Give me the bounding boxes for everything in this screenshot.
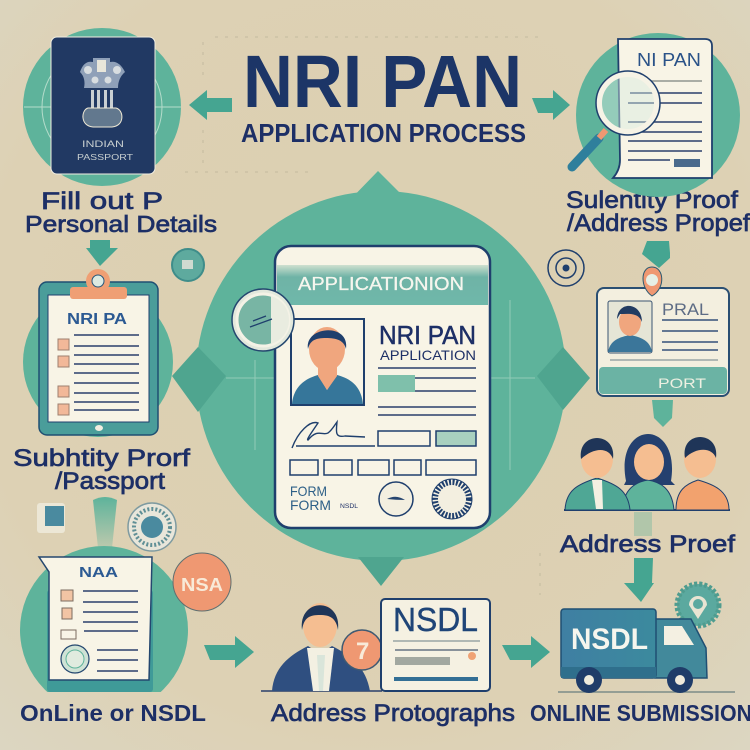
label: identity and address proof [566, 187, 750, 237]
cab [655, 619, 707, 678]
teal circle [576, 33, 740, 197]
window [664, 626, 694, 645]
wheels [576, 667, 693, 693]
chassis [561, 667, 656, 678]
label: online or NSDL: OnLine or NSDL [20, 700, 206, 726]
stamp [432, 479, 472, 519]
label: identity proof passport [13, 445, 190, 495]
step: ID card [597, 288, 729, 396]
step: passport [23, 28, 181, 186]
card lines [610, 320, 718, 360]
title: NRI PAN: NRI PAN [243, 40, 522, 123]
subtitle: APPLICATION PROCESS [241, 118, 526, 148]
signature [292, 422, 375, 448]
document lines [628, 81, 702, 160]
label: identity and address proof: /Address Propef [567, 210, 750, 237]
applicant photo [291, 319, 364, 405]
icon: small coin [172, 249, 204, 281]
arrow: to document [532, 90, 570, 120]
form title [379, 320, 476, 363]
passport text: INDIAN [82, 139, 124, 149]
form card [275, 246, 490, 528]
passport text [77, 139, 133, 162]
card heading: PRAL [662, 300, 709, 319]
teal circle [23, 287, 173, 437]
suit body [272, 646, 370, 691]
step: people group [564, 434, 730, 510]
orange badge: 7 [356, 638, 369, 665]
form labels: FORM [290, 483, 327, 499]
document heading: NAA [79, 564, 118, 581]
arrow: faded connector [634, 512, 652, 536]
form title: APPLICATION [380, 347, 476, 363]
document tab [674, 159, 700, 167]
teal circle [20, 546, 188, 692]
form boxes row two [290, 460, 476, 475]
form labels: NSDL [340, 504, 359, 510]
label: fill out personal details: Fill out P [41, 188, 163, 215]
label: identity proof passport: /Passport [55, 468, 165, 495]
form labels: FORM [290, 497, 331, 513]
label: address photographs: Address Protographs [271, 700, 515, 727]
paper heading: NRI PA [67, 311, 127, 328]
magnifier [572, 71, 660, 167]
national emblem [80, 58, 125, 127]
arrow: to id card [642, 241, 670, 268]
passport cover [51, 37, 155, 174]
arrow: id card to people [652, 400, 673, 427]
form labels [290, 483, 359, 513]
form boxes row one [378, 431, 476, 446]
central teal circle with pointers [172, 171, 590, 586]
icon: pin [643, 267, 662, 296]
document heading: NI PAN [637, 50, 701, 70]
icon: seal [128, 503, 176, 551]
passport text: PASSPORT [77, 153, 133, 162]
step: clipboard [23, 269, 173, 437]
left man [565, 438, 630, 510]
step: truck [558, 584, 735, 693]
card photo [608, 301, 652, 353]
NSDL card: NSDL [393, 601, 478, 638]
badge: NSA: NSA [181, 575, 223, 595]
arrow: to clipboard [86, 240, 118, 266]
card header with heading [277, 265, 488, 305]
step: document and magnifier [572, 33, 740, 197]
arrow: to truck [502, 636, 550, 668]
label: fill out personal details [25, 188, 217, 237]
orange badge [342, 630, 382, 670]
document fields [61, 590, 76, 639]
head [302, 603, 338, 647]
gear [677, 584, 719, 626]
home button [95, 425, 103, 431]
cargo box [561, 609, 656, 678]
form title: NRI PAN [379, 320, 476, 350]
central panel: application form [172, 171, 590, 586]
woman [622, 434, 675, 510]
label: fill out personal details: Personal Details [25, 211, 217, 237]
label: identity proof passport: Subhtity Prorf [13, 445, 190, 472]
document seal [61, 645, 89, 673]
clipboard paper [48, 295, 149, 422]
signature circle [379, 482, 413, 516]
document [613, 39, 712, 178]
checklist lines [74, 335, 139, 410]
label: identity and address proof: Sulentity Proof [566, 187, 738, 214]
checklist [58, 339, 69, 415]
clipboard board [39, 282, 158, 435]
card header with heading: APPLICATIONION [298, 274, 464, 294]
badge: NSA [173, 553, 231, 611]
arrow: to truck from address proof [624, 558, 654, 602]
arrow: to passport [189, 90, 232, 120]
step: advisor and NSDL card [261, 599, 490, 691]
step: document [20, 546, 188, 692]
shirt and tie [307, 648, 334, 691]
ground line [261, 690, 382, 692]
form lines [378, 368, 476, 415]
teal highlight block [378, 375, 415, 392]
NSDL card [381, 599, 490, 691]
document base [47, 590, 153, 692]
label: address proof: Address Proef [560, 531, 735, 558]
ground line [564, 509, 730, 511]
card body [597, 288, 729, 396]
title block [241, 40, 526, 148]
cargo label: NSDL [571, 623, 648, 656]
magnified seal [232, 289, 294, 351]
teal circle [23, 28, 181, 186]
ground line [558, 691, 735, 693]
clip [70, 269, 127, 299]
icon: small card [37, 503, 65, 533]
passport strip: PORT [658, 375, 707, 391]
woman right man [676, 437, 729, 510]
icon: target rings [548, 250, 584, 286]
arrow: to advisor [204, 636, 254, 668]
arrow: faded down [93, 497, 117, 548]
document lines [83, 591, 138, 671]
document paper [39, 557, 152, 680]
